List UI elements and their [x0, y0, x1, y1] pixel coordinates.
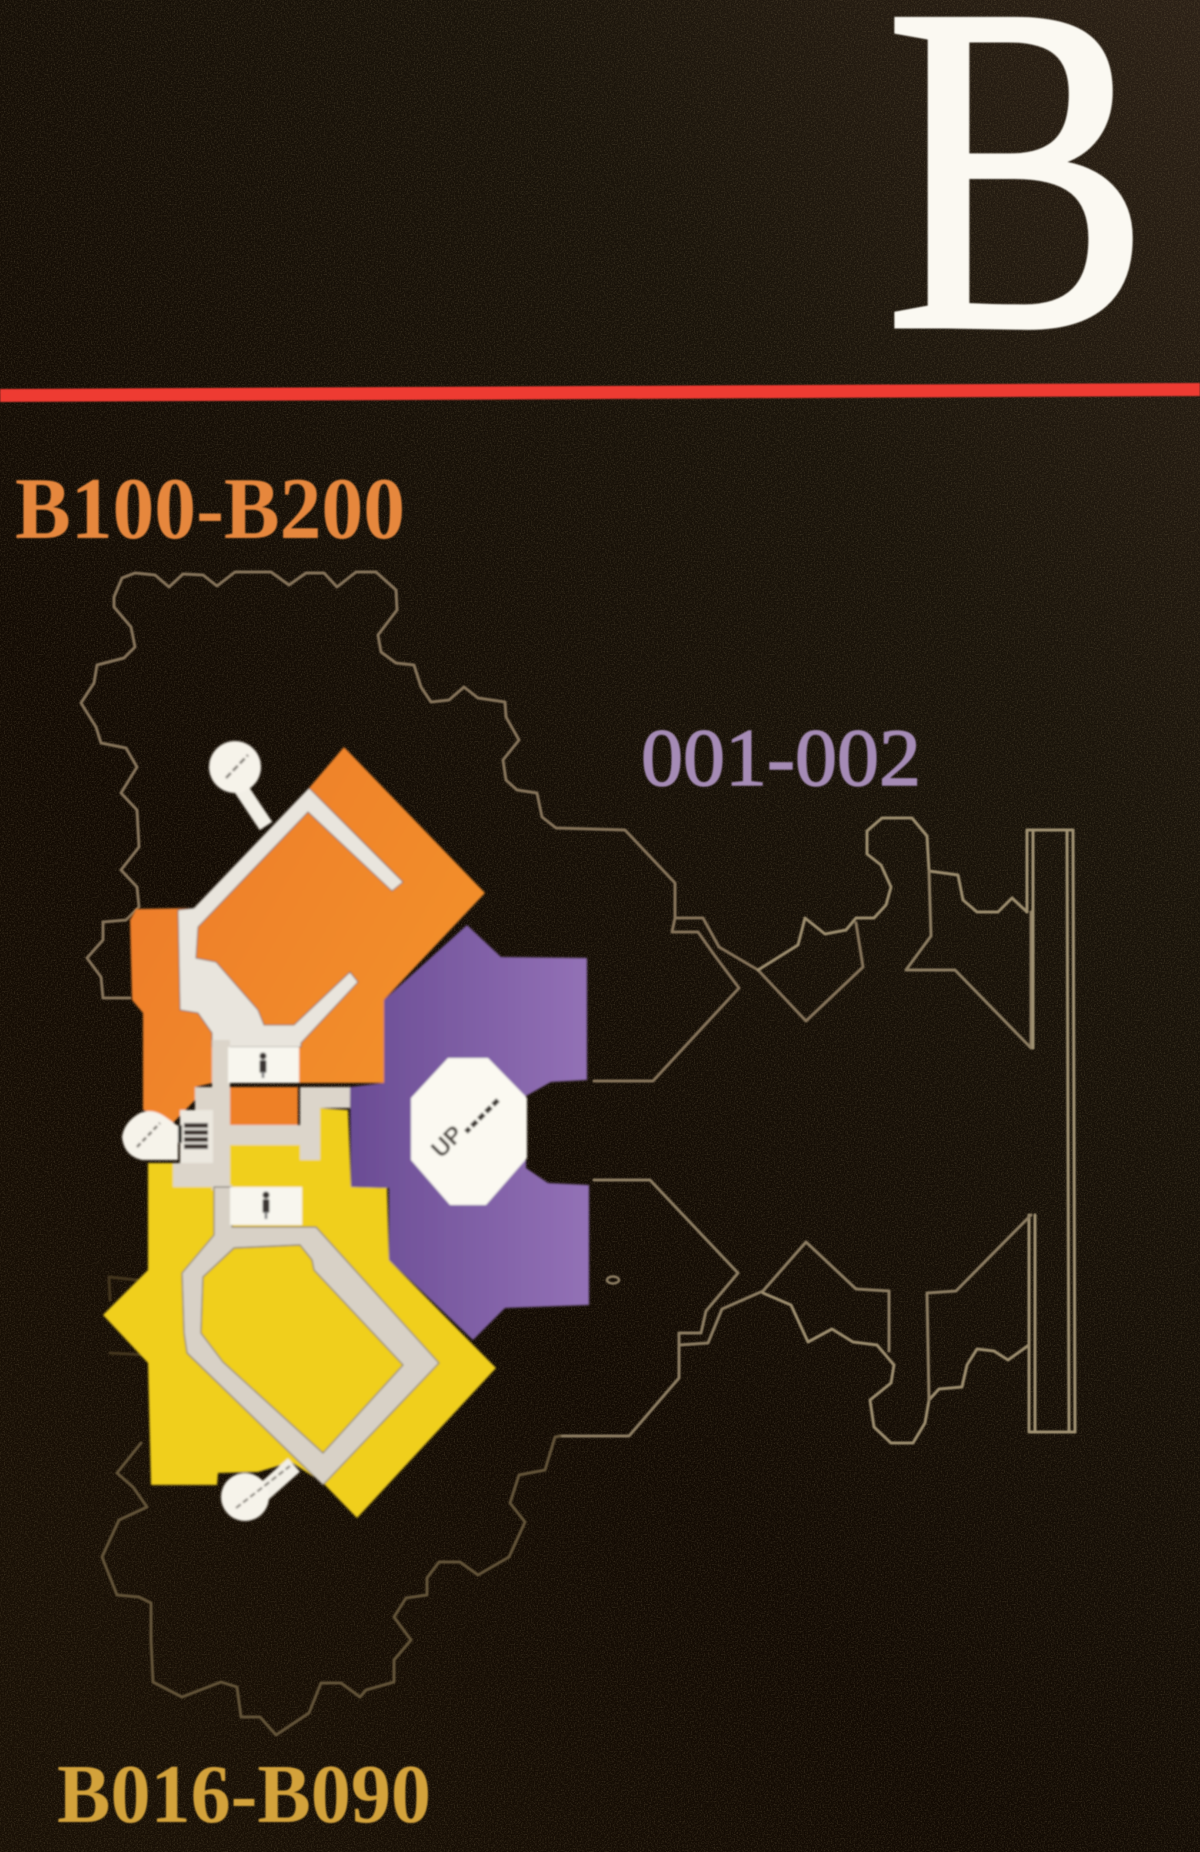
corridor: yellow wing ring — [182, 1187, 439, 1485]
outline: upper inner wall — [594, 918, 739, 1081]
zone: purple 001-002 — [350, 925, 589, 1340]
label: B016-B090: B016-B090 — [57, 1748, 431, 1841]
floor plan: coloured zones and corridors — [103, 741, 589, 1521]
outline: lower inner wall — [679, 1242, 889, 1351]
restroom box: lower — [230, 1187, 302, 1225]
outline: faint left wall — [109, 1277, 137, 1300]
corridor: orange wing — [178, 788, 403, 1047]
corridor: central spine and connectors — [173, 1040, 350, 1235]
outer building outline — [81, 572, 1075, 1735]
escalator node: left — [122, 1111, 178, 1160]
small floor mark — [607, 1276, 619, 1284]
escalator node: bottom — [221, 1465, 294, 1521]
escalator node: top — [209, 741, 266, 826]
outline: upper funnel — [906, 871, 1031, 1048]
outline: far-right wall — [1027, 830, 1075, 1432]
icon: restroom figure — [260, 1052, 266, 1078]
label: B100-B200: B100-B200 — [15, 461, 405, 558]
zone: yellow B016-B090 — [103, 1108, 496, 1518]
zone: orange B100-B200 — [130, 747, 485, 1123]
label: 001-002: 001-002 — [641, 712, 921, 803]
outline: lower funnel — [927, 1215, 1031, 1400]
zone: small orange room — [230, 1087, 298, 1125]
outline: faint left wall lower — [110, 1353, 148, 1355]
restroom box: upper — [228, 1047, 299, 1083]
icon: stairs — [175, 1123, 208, 1149]
outline: upper perimeter — [81, 572, 863, 1021]
central escalator octagon — [411, 1058, 527, 1205]
red divider line — [0, 383, 1200, 402]
outline: lower perimeter — [102, 1436, 560, 1735]
icon: restroom figure — [262, 1192, 270, 1219]
elevator and stairs core — [175, 1110, 213, 1163]
outline: upper right wing — [758, 818, 1027, 970]
outline: lower wing detail — [763, 1293, 1029, 1443]
outline: lower right wing — [560, 1180, 738, 1436]
icon text: UP: UP — [426, 1121, 469, 1163]
